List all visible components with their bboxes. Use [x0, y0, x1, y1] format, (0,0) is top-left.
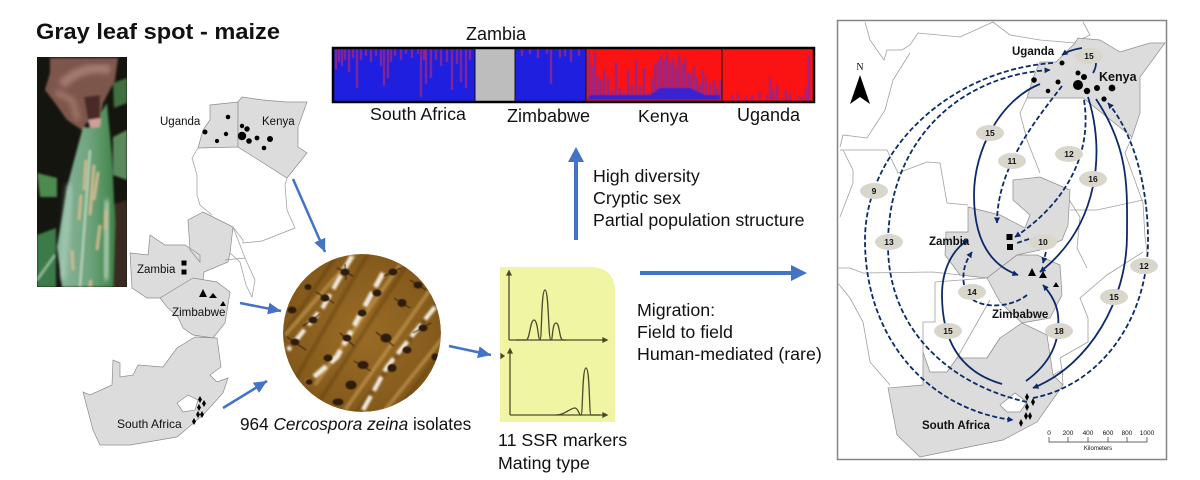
arcs: solid migration routes	[942, 48, 1127, 388]
badges: migration counts: 12	[1064, 149, 1074, 159]
labels: left map: South Africa	[117, 417, 182, 431]
badges: migration counts: 12	[1139, 261, 1149, 271]
chart: upper trace	[507, 271, 607, 342]
text: migration: Migration:	[637, 300, 715, 320]
caption: markers: Mating type	[498, 453, 590, 473]
region: South Africa	[888, 323, 1063, 457]
region: Uganda and Kenya	[198, 97, 307, 178]
scale bar: 400	[1083, 430, 1094, 437]
text: migration: Field to field	[637, 322, 733, 342]
arrow: right to migration map	[640, 271, 795, 275]
scale bar: Kilometers	[1084, 446, 1112, 452]
labels: left map: Zimbabwe	[172, 306, 225, 319]
arcs: dashed migration routes	[865, 63, 1148, 420]
arrow: Zimbabwe to isolates	[240, 303, 281, 311]
arrowhead: right	[791, 265, 807, 281]
text: migration: Human-mediated (rare)	[637, 344, 822, 364]
scale bar: 1000	[1140, 430, 1155, 437]
badges: migration counts: 11	[1008, 156, 1017, 166]
labels: left map	[117, 116, 295, 431]
markers: sampling sites	[182, 115, 273, 425]
photo: infected maize leaf	[37, 57, 127, 287]
labels: country names: Kenya	[1099, 70, 1138, 84]
outline: background countries	[837, 22, 1147, 385]
caption: markers: 11 SSR markers	[498, 430, 627, 450]
scale bar: 0	[1047, 430, 1051, 437]
arrow: South Africa to isolates	[223, 381, 267, 408]
labels: country names: Zimbabwe	[992, 309, 1048, 321]
photo: Cercospora zeina micrograph	[283, 254, 441, 412]
streaks: admixture	[336, 49, 809, 100]
labels: left map: Kenya	[262, 116, 295, 128]
labels: structure populations: Uganda	[737, 105, 801, 125]
markers: sampling sites	[1006, 60, 1115, 427]
arrow: up to structure plot	[574, 155, 578, 240]
labels: structure populations: Kenya	[638, 106, 689, 126]
region: Zambia	[130, 212, 233, 298]
badges: migration counts: 15	[1084, 51, 1094, 61]
text: population findings: Partial population structure	[593, 210, 805, 230]
badges: migration counts: 9	[872, 186, 877, 196]
region: Zimbabwe	[160, 278, 230, 338]
outline: Tanzania, Malawi and neighbours	[192, 148, 295, 297]
labels: country names: Zambia	[929, 236, 970, 248]
arrow: Kenya-Uganda to isolates	[293, 179, 325, 252]
title: Gray leaf spot - maize	[36, 19, 280, 44]
arrow: isolates to markers	[449, 346, 491, 355]
labels: structure populations	[370, 24, 801, 126]
panel: SSR electropherograms	[500, 267, 615, 422]
labels: structure populations: South Africa	[370, 104, 466, 124]
icon: north arrow: N	[856, 62, 864, 73]
region: Uganda and Kenya	[1027, 38, 1165, 137]
labels: structure populations: Zambia	[466, 24, 527, 44]
panel: migration map	[837, 20, 1166, 460]
badges: migration counts: 18	[1054, 326, 1064, 336]
region: Zimbabwe	[987, 255, 1062, 323]
badges: migration counts: 15	[1109, 292, 1119, 302]
badges: migration counts: 15	[943, 326, 953, 336]
map: sampling regions (left)	[83, 97, 307, 445]
scale bar: 600	[1103, 430, 1114, 437]
badges: migration counts: 16	[1088, 174, 1098, 184]
labels: country names: Uganda	[1012, 46, 1055, 58]
text: population findings: Cryptic sex	[593, 188, 681, 208]
scale bar: 200	[1063, 430, 1074, 437]
labels: structure populations: Zimbabwe	[507, 106, 590, 126]
badges: migration counts: 13	[884, 237, 894, 247]
region: South Africa	[83, 337, 228, 445]
labels: country names: South Africa	[922, 420, 991, 432]
badges: migration counts: 15	[985, 128, 995, 138]
scale bar	[1047, 430, 1155, 452]
labels: left map: Zambia	[137, 264, 176, 276]
chart: population structure bar	[333, 48, 814, 102]
scale bar: 800	[1122, 430, 1133, 437]
labels: left map: Uganda	[160, 116, 201, 128]
caption: isolates: 964 Cercospora zeina isolates	[240, 414, 471, 434]
badges: migration counts: 10	[1038, 237, 1048, 247]
arrowhead: up	[568, 147, 584, 162]
labels: country names	[922, 46, 1138, 432]
text: population findings: High diversity	[593, 166, 700, 186]
icon: north arrow	[850, 62, 870, 104]
badges: migration counts	[860, 48, 1158, 339]
region: Zambia	[945, 177, 1070, 278]
badges: migration counts: 14	[967, 287, 977, 297]
chart: lower trace	[501, 349, 607, 417]
